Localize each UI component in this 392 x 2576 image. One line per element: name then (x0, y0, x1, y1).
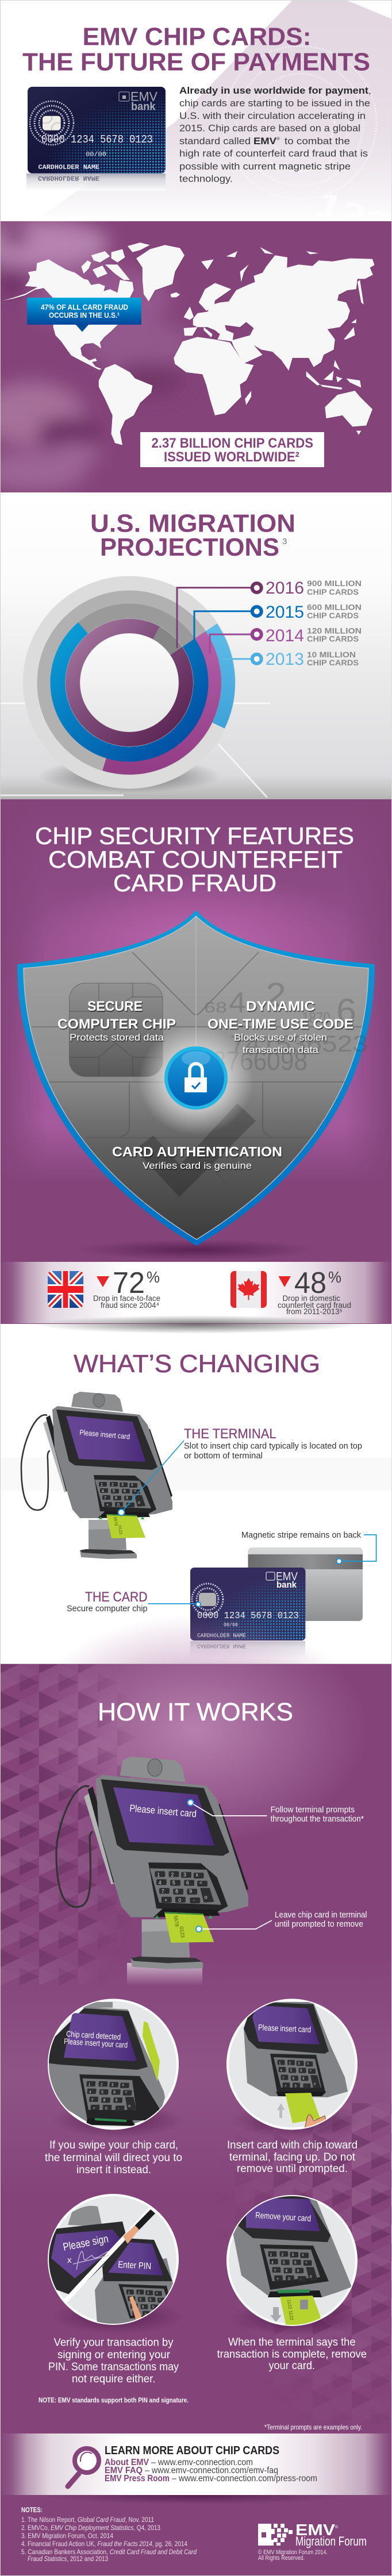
callout: follow prompts: throughout the transaction* (271, 1815, 364, 1824)
intro text: high rate of counterfeit card fraud that is (179, 148, 368, 159)
step 3: sign or enter pin: +0- (134, 2313, 156, 2317)
step 2: insert card: 456< (280, 2068, 312, 2073)
learn more band shadow (47, 2488, 345, 2504)
step 2: insert card: +0- (285, 2084, 306, 2089)
step 3 caption: PIN. Some transactions may (48, 2361, 179, 2373)
green chip card (164, 1912, 214, 1943)
step 1: swipe card: 789 (91, 2098, 118, 2103)
chip card illustration: EMV (130, 90, 157, 104)
heading: COMBAT COUNTERFEIT (48, 846, 343, 873)
title: THE FUTURE OF PAYMENTS (22, 48, 370, 76)
feature: secure computer chip: SECURE (87, 999, 143, 1014)
world map (2, 242, 374, 445)
step 2 caption: remove until prompted. (237, 2163, 348, 2175)
step 2: insert card (226, 1999, 358, 2130)
legend: 2016 (252, 579, 362, 598)
intro text: standard called (179, 136, 251, 147)
logo: emv migration forum (258, 2521, 367, 2562)
callout: the terminal: THE TERMINAL (184, 1426, 276, 1442)
intro text: possible with current magnetic stripe (179, 161, 351, 172)
large terminal illustration: Please insert card (129, 1802, 197, 1819)
step 1: swipe card: Chip card detected (66, 2029, 121, 2042)
panel: fraud statistics band (0, 1262, 392, 1323)
terminal illustration (21, 1392, 172, 1559)
feature: secure computer chip: COMPUTER CHIP (57, 1016, 176, 1032)
watermark: digits: 68 (204, 999, 227, 1016)
notes: 5. Canadian Bankers Association, Credit Card Fraud and Debit Card (21, 2548, 197, 2556)
callout: magnetic stripe (241, 1530, 376, 1564)
notes: 4. Financial Fraud Action UK, Fraud the Facts 2014, pg. 26, 2014 (21, 2540, 187, 2548)
green chip card: 5678 (113, 1516, 118, 1526)
step 1: swipe card: o (128, 2104, 130, 2108)
stat: canada 48 percent: Drop in domestic (283, 1293, 340, 1303)
step 4: remove card: o (310, 2274, 312, 2279)
intro text: EMV (253, 136, 277, 147)
icon: magnifier (68, 2448, 99, 2486)
intro text: 2015. Chip cards are based on a global (179, 123, 360, 134)
feature: dynamic one-time use code: ONE-TIME USE CODE (207, 1016, 353, 1032)
panel: chip security features (0, 799, 392, 1262)
step 1: swipe card: +0- (93, 2107, 120, 2111)
note: terminal prompts: *Terminal prompts are examples only. (264, 2423, 362, 2431)
feature: secure computer chip (57, 999, 176, 1043)
card reflection: CARDHOLDER NAME (38, 174, 99, 181)
green chip card: 5678 (172, 1915, 180, 1927)
panel: learn more: – www.emv-connection.com (151, 2458, 253, 2467)
step 1: swipe card: 123x (88, 2083, 125, 2087)
legend: 2014: 2014 (266, 626, 304, 645)
chip card front: bank (276, 1580, 297, 1590)
step 1: swipe card (46, 1999, 179, 2130)
intro text (179, 85, 371, 184)
intro text: technology. (179, 174, 233, 184)
panel: what's changing (0, 1315, 392, 1664)
step 2: insert card: o (314, 2082, 316, 2086)
large terminal illustration: 123x (157, 1872, 199, 1877)
callout: cards issued: 2.37 BILLION CHIP CARDS (152, 436, 313, 451)
feature: dynamic one-time use code (207, 999, 353, 1055)
notes (21, 2506, 197, 2563)
panel: learn more: – www.emv-connection.com/emv-faq (145, 2466, 278, 2475)
watermark: check mark (135, 1103, 256, 1197)
step 4: remove card: 456< (271, 2261, 308, 2265)
chip card front (190, 1568, 306, 1641)
logo: emv migration forum: Migration Forum (295, 2534, 367, 2548)
step 4 caption: transaction is complete, remove (217, 2348, 367, 2361)
heading: CARD FRAUD (113, 869, 276, 896)
chip card front: 0000 1234 5678 0123 (197, 1611, 299, 1622)
legend: 2013 (252, 650, 359, 669)
step 4 shadow (230, 2301, 363, 2335)
intro text: , (368, 85, 371, 96)
callout: card fraud (27, 298, 141, 332)
callout: card fraud: OCCURS IN THE U.S.¹ (49, 311, 120, 319)
callout: leave card (196, 1910, 367, 1932)
card reflection (26, 174, 166, 191)
notes: Fraud Statistics, 2012 and 2013 (28, 2555, 108, 2563)
step 1 shadow (52, 2103, 184, 2138)
card front reflection (190, 1641, 305, 1658)
intro text: chip cards are starting to be issued in the (179, 98, 370, 109)
heading: CHIP SECURITY FEATURES (35, 822, 354, 849)
heading: PROJECTIONS (100, 533, 279, 561)
stat: uk 72 percent: 72 (113, 1266, 145, 1300)
callout: card fraud: 47% OF ALL CARD FRAUD (41, 303, 128, 311)
step 3 caption: signing or entering your (57, 2349, 171, 2361)
title (22, 22, 370, 76)
callout: follow prompts: Follow terminal prompts (271, 1805, 355, 1815)
stat: uk 72 percent: fraud since 2004⁴ (101, 1300, 159, 1310)
step 1 caption: If you swipe your chip card, (49, 2139, 178, 2151)
step 3: sign or enter pin: Please sign (62, 2233, 109, 2254)
heading (35, 822, 354, 896)
legend: 2013: CHIP CARDS (307, 658, 359, 667)
legend: 2016: 2016 (266, 579, 304, 598)
step 3 caption: not require either. (72, 2373, 155, 2385)
watermark: digits: 2 (266, 976, 286, 1014)
intro text: Already in use worldwide for payment (179, 85, 368, 96)
callout: leave card: until prompted to remove (275, 1919, 363, 1929)
terminal reflection (127, 1963, 202, 1986)
terminal illustration: Please insert card (79, 1428, 130, 1441)
panel: migration projections (0, 492, 392, 799)
legend: 2015 (252, 603, 362, 622)
step 4: remove card (226, 2192, 358, 2327)
card front reflection: CARDHOLDER NAME (197, 1642, 246, 1649)
ring: 2013 (212, 627, 228, 726)
watermark: digits: 6 (336, 992, 356, 1030)
step 4: remove card: Remove your card (255, 2211, 312, 2224)
ring: 2015 (58, 628, 201, 754)
step 3: sign or enter pin: 456< (129, 2298, 162, 2302)
terminal illustration: o (138, 1501, 140, 1505)
step 2 caption: terminal, facing up. Do not (229, 2151, 356, 2163)
large terminal illustration: +0- (164, 1897, 194, 1903)
large terminal illustration: 456< (159, 1880, 202, 1885)
notes: 3. EMV Migration Forum, Oct. 2014 (21, 2532, 113, 2540)
step 4: remove card: 1122 1122 (286, 2299, 294, 2321)
large terminal illustration: o (205, 1895, 207, 1900)
legend: 2013: 2013 (266, 650, 304, 669)
watermark: digits (204, 976, 368, 1076)
chip card illustration: 0000 1234 5678 0123 (41, 133, 153, 146)
feature: card authentication (112, 1145, 282, 1171)
panel: learn more: About EMV (105, 2458, 149, 2467)
panel: learn more: – www.emv-connection.com/press-room (172, 2474, 317, 2483)
chip card front: EMV (276, 1570, 298, 1583)
stat: canada 48 percent: 48 (294, 1266, 326, 1300)
step 1: swipe card: 456< (89, 2090, 127, 2094)
step 2: insert card: 789 (282, 2076, 305, 2081)
card back with magnetic stripe (248, 1547, 363, 1621)
intro text: to combat the (285, 136, 350, 147)
large terminal illustration (56, 1757, 248, 1969)
terminal illustration: 456< (102, 1489, 136, 1493)
green chip card: 0123 (117, 1525, 122, 1535)
stat: uk 72 percent (93, 1266, 160, 1310)
stat: uk 72 percent: Drop in face-to-face (93, 1293, 160, 1303)
notes: 1. The Nilson Report, Global Card Fraud, Nov. 2011 (21, 2516, 154, 2524)
stat: canada 48 percent: % (328, 1268, 341, 1286)
heading: WHAT’S CHANGING (74, 1350, 320, 1378)
chip card illustration: bank (131, 101, 156, 113)
step 4 caption: When the terminal says the (228, 2336, 355, 2348)
callout: the card: THE CARD (85, 1589, 148, 1605)
step 3: sign or enter pin: Enter PIN (118, 2260, 152, 2271)
watermark: digits: 8766098 (213, 1046, 308, 1076)
donut shadow (37, 758, 221, 793)
panel: learn more: EMV FAQ (105, 2466, 143, 2475)
callout: the terminal: or bottom of terminal (184, 1451, 263, 1461)
legend: 2015: 2015 (266, 603, 304, 622)
logo: emv migration forum: ® (335, 2525, 339, 2529)
callout: the terminal (118, 1426, 362, 1516)
step 3: sign or enter pin: 789 (132, 2305, 155, 2309)
icon: uk flag (48, 1271, 83, 1308)
watermark card digits: 123 (310, 184, 392, 247)
step 3 caption: Verify your transaction by (54, 2337, 174, 2349)
step 4: remove card: 789 (274, 2269, 299, 2273)
notes: 2. EMVCo, EMV Chip Deployment Statistics, Q4, 2013 (21, 2524, 160, 2532)
callout: magnetic stripe: Magnetic stripe remains on back (241, 1530, 361, 1540)
logo mark (258, 2524, 293, 2546)
step 1 caption (45, 2139, 182, 2176)
step 3: sign or enter pin: 123x (128, 2292, 158, 2296)
chip card illustration: CARDHOLDER NAME (38, 164, 99, 171)
large terminal illustration: 789 (162, 1889, 192, 1895)
step 1: swipe card: Please insert your card (64, 2036, 128, 2050)
step 1 caption: the terminal will direct you to (45, 2152, 182, 2164)
title: EMV CHIP CARDS: (83, 22, 312, 51)
step 2 caption (227, 2139, 358, 2175)
callout: cards issued: ISSUED WORLDWIDE² (164, 449, 299, 465)
icon: canada flag (230, 1271, 267, 1308)
feature: card authentication: Verifies card is genuine (143, 1160, 252, 1171)
ring: 2014 (105, 635, 214, 768)
donut chart (23, 576, 236, 788)
callout: the card: Secure computer chip (67, 1604, 148, 1614)
chip graphic (69, 983, 163, 1077)
callout: the terminal: Slot to insert chip card typically is located on top (184, 1441, 362, 1451)
stat: uk 72 percent: % (147, 1268, 160, 1286)
step 4 caption (217, 2336, 367, 2372)
heading: U.S. MIGRATION (90, 510, 295, 538)
legend: 2013: 10 MILLION (307, 650, 356, 659)
step 4 caption: your card. (269, 2360, 315, 2372)
heading: 3 (282, 537, 287, 546)
stat: canada 48 percent (278, 1266, 351, 1316)
heading (90, 510, 295, 561)
green chip card: 0123 (179, 1926, 186, 1938)
step 2: insert card: Please insert card (258, 2023, 311, 2035)
chip card front: CARDHOLDER NAME (197, 1633, 246, 1639)
callout: the card (67, 1589, 201, 1614)
legend: 2014: CHIP CARDS (307, 634, 359, 644)
intro text: U.S. with their circulation accelerating in (179, 110, 366, 121)
glow behind lock (139, 1026, 253, 1135)
step 3: sign or enter pin: x (67, 2255, 72, 2265)
step 3 shadow (52, 2300, 184, 2334)
chip card front: 00/00 (224, 1622, 238, 1628)
feature: dynamic one-time use code: Blocks use of stolen (234, 1032, 327, 1043)
stat: canada 48 percent: counterfeit card fraud (278, 1300, 351, 1310)
step 3: sign or enter pin: o (163, 2311, 166, 2314)
panel: world map (0, 220, 392, 492)
ring: 2016 (72, 626, 186, 739)
legend: 2014: 120 MILLION (307, 626, 362, 636)
legend: 2015: 600 MILLION (307, 603, 362, 612)
feature: dynamic one-time use code: DYNAMIC (246, 999, 315, 1014)
legend: 2016: CHIP CARDS (307, 587, 359, 596)
chip card illustration: 00/00 (86, 152, 106, 159)
intro text: ® (276, 136, 280, 141)
learn more text: LEARN MORE ABOUT CHIP CARDS (105, 2444, 279, 2457)
green chip card (106, 1514, 145, 1538)
shield (17, 910, 375, 1246)
legend leader lines (177, 588, 251, 659)
feature: card authentication: CARD AUTHENTICATION (112, 1145, 282, 1160)
heading: HOW IT WORKS (98, 1698, 293, 1726)
step 3 caption (48, 2337, 179, 2385)
panel: header (23, 1, 391, 205)
chip card illustration (28, 87, 166, 174)
step 2: insert card: 123x (279, 2061, 309, 2066)
terminal illustration: +0- (106, 1503, 130, 1507)
callout: cards issued (140, 432, 324, 467)
step 4: remove card: 123x (270, 2253, 304, 2257)
callout: follow prompts (187, 1800, 364, 1824)
shield shadow (76, 1239, 317, 1260)
panel: how it works (0, 1615, 392, 2575)
step 2 caption: Insert card with chip toward (227, 2139, 358, 2151)
step 3: sign or enter pin (48, 2194, 184, 2333)
legend: 2016: 900 MILLION (307, 579, 362, 588)
logo: emv migration forum: EMV (295, 2521, 335, 2539)
watermark: digits: 1870 (302, 1009, 330, 1026)
stat: canada 48 percent: from 2011-2013⁵ (286, 1307, 343, 1316)
legend: 2014 (252, 626, 362, 645)
step 4: remove card: +0- (276, 2277, 301, 2281)
watermark: digits: 4 (229, 987, 246, 1019)
terminal illustration: 123x (101, 1483, 133, 1487)
icon: padlock badge (164, 1046, 228, 1110)
panel: learn more: EMV Press Room (105, 2474, 170, 2483)
logo: emv migration forum: All Rights Reserved. (258, 2555, 305, 2562)
note: pin and signature: NOTE: EMV standards support both PIN and signature. (39, 2397, 189, 2404)
callout: leave card: Leave chip card in terminal (275, 1910, 367, 1920)
step 1 caption: insert it instead. (76, 2164, 151, 2176)
terminal illustration: 789 (104, 1496, 128, 1500)
panel: learn more (0, 2433, 392, 2495)
legend: 2015: CHIP CARDS (307, 611, 359, 620)
step 2 shadow (230, 2103, 363, 2138)
watermark: digits: 741536523 (230, 1031, 368, 1057)
feature: secure computer chip: Protects stored data (70, 1032, 164, 1043)
logo: emv migration forum: © EMV Migration Forum 2014. (258, 2549, 328, 2556)
notes: NOTES: (21, 2506, 43, 2514)
feature: dynamic one-time use code: transaction data (243, 1045, 319, 1055)
